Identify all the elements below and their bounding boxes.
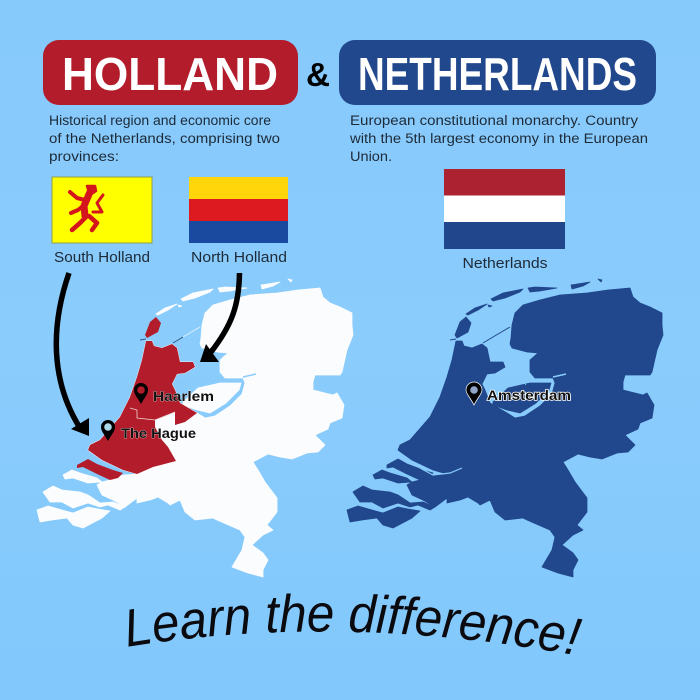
city label: The Hague: The Hague	[121, 425, 196, 441]
red region: North and South Holland	[77, 317, 197, 480]
icon: red lion	[70, 186, 103, 230]
heading pill: Netherlands: NETHERLANDS	[358, 48, 637, 100]
map pin: Amsterdam	[466, 382, 482, 405]
blue land	[347, 279, 663, 577]
ampersand: &	[306, 56, 330, 93]
city label: Haarlem: Haarlem	[153, 388, 214, 404]
text block: Holland description: provinces:	[49, 149, 119, 164]
flag: South Holland	[52, 177, 152, 243]
map: Holland within the Netherlands	[37, 279, 353, 577]
heading pill: Netherlands	[339, 40, 656, 105]
flag: Netherlands	[444, 169, 565, 249]
label: North Holland: North Holland	[191, 250, 287, 266]
label: South Holland: South Holland	[54, 250, 150, 266]
arrow: South Holland to map	[56, 273, 89, 436]
map pin: The Hague	[101, 420, 115, 441]
text block: Netherlands description: with the 5th largest economy in the European	[349, 131, 648, 146]
tagline: Learn the difference!	[128, 594, 582, 654]
white land	[37, 279, 353, 577]
text block: Netherlands description: Union.	[350, 149, 392, 164]
heading pill: Holland: HOLLAND	[62, 48, 278, 100]
map: the Netherlands	[347, 279, 663, 577]
city label: Amsterdam: Amsterdam	[487, 387, 571, 403]
flag: North Holland	[189, 177, 288, 243]
text block: Netherlands description: European constitutional monarchy. Country	[350, 113, 638, 128]
text block: Holland description: Historical region and economic core	[49, 113, 271, 128]
map pin: Haarlem	[134, 383, 148, 404]
text block: Netherlands description	[349, 113, 648, 164]
label: Netherlands: Netherlands	[462, 256, 548, 272]
text block: Holland description: of the Netherlands, comprising two	[49, 131, 280, 146]
text block: Holland description	[49, 113, 280, 164]
arrow: North Holland to map	[200, 273, 240, 362]
